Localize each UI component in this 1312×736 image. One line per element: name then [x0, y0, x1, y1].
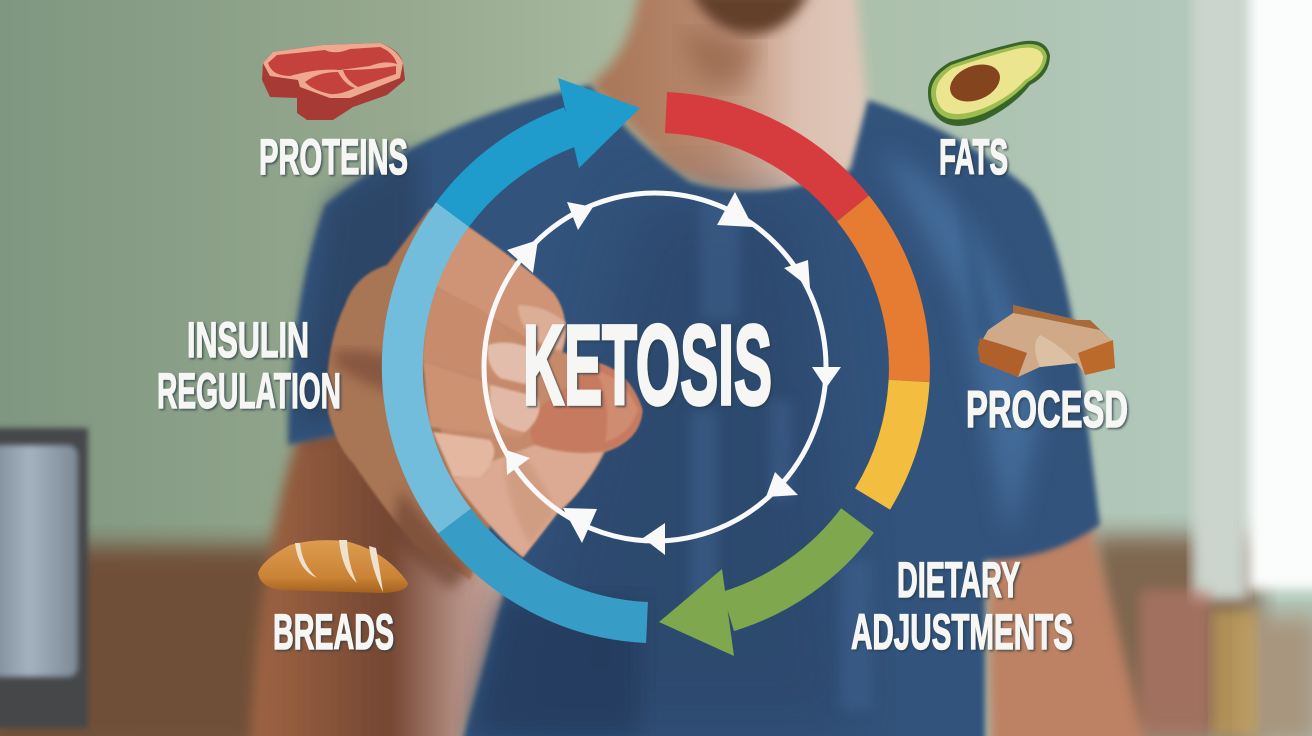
- segment: yellow: [872, 381, 909, 499]
- icon: bread slice: [978, 305, 1115, 377]
- icon: steak: [262, 43, 405, 120]
- label: fats: FATS: [939, 129, 1008, 185]
- hand base: [423, 227, 642, 557]
- label: insulin regulation: REGULATION: [157, 363, 341, 419]
- segment: green arrow: [659, 520, 858, 656]
- arm left: [250, 430, 505, 736]
- segment: orange: [853, 208, 909, 381]
- label: dietary adjustments: [851, 552, 1073, 660]
- person: [250, 0, 1150, 736]
- hand: [327, 208, 642, 590]
- segment: top blue arrow: [452, 78, 640, 214]
- inner circle with arrowheads: [484, 192, 841, 555]
- back of thumb: [327, 208, 500, 580]
- shirt folds: [690, 200, 872, 710]
- icon: avocado: [928, 41, 1050, 126]
- pinky: [433, 432, 494, 477]
- icon: bread loaf: [258, 540, 408, 593]
- segment: red: [666, 112, 853, 208]
- thumb: [530, 363, 642, 452]
- segment: lower blue: [454, 521, 647, 622]
- segment: light blue: [402, 214, 454, 521]
- label: dietary adjustments: ADJUSTMENTS: [851, 604, 1073, 660]
- ring finger: [423, 362, 539, 437]
- label: breads: BREADS: [273, 604, 394, 660]
- label: dietary adjustments: DIETARY: [897, 552, 1020, 608]
- neck and chin: [590, 0, 868, 192]
- arm right: [985, 520, 1150, 736]
- title: KETOSIS: KETOSIS: [523, 302, 772, 428]
- index finger: [420, 227, 565, 352]
- t-shirt: [288, 85, 1100, 736]
- lower palm: [453, 445, 603, 557]
- middle finger: [423, 290, 540, 385]
- label: insulin regulation: INSULIN: [187, 312, 309, 368]
- label: insulin regulation: [157, 312, 341, 419]
- label: processed: PROCESD: [966, 381, 1128, 439]
- label: proteins: PROTEINS: [259, 129, 408, 185]
- cycle ring: [402, 78, 909, 656]
